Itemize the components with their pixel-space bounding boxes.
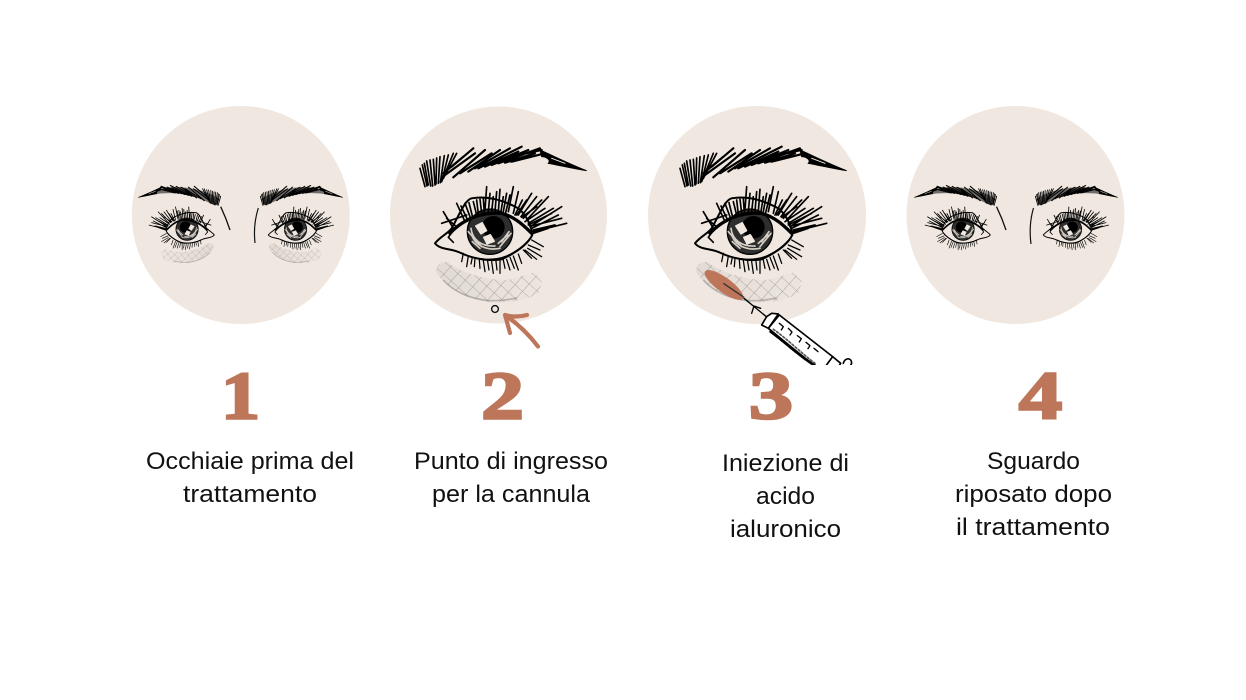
circle background <box>132 106 350 324</box>
circle background <box>390 106 607 324</box>
icon: syringe <box>744 298 852 372</box>
entry point marker <box>492 306 498 312</box>
illustration: rested eyes <box>914 186 1118 250</box>
infographic: four treatment steps <box>132 106 1124 537</box>
circle background <box>648 106 866 324</box>
panel: step 3 <box>648 106 866 543</box>
illustration: single eye with hatch <box>680 147 847 307</box>
illustration: single eye with hatch <box>420 147 587 307</box>
caption: step 4: riposato dopo <box>955 481 1112 508</box>
caption: step 1: Occhiaie prima del <box>146 448 354 475</box>
circle background <box>906 106 1124 324</box>
number 4: 4 <box>1019 358 1062 433</box>
caption: step 2: Punto di ingresso <box>414 448 608 475</box>
caption: step 3: ialuronico <box>730 516 841 543</box>
panel: step 2 <box>390 106 608 508</box>
caption: step 3: acido <box>756 483 815 510</box>
illustration: eyes with dark circles <box>138 186 343 265</box>
caption: step 4: il trattamento <box>956 514 1110 541</box>
number 2: 2 <box>481 358 524 433</box>
caption: step 1: trattamento <box>183 481 317 508</box>
number 1: 1 <box>221 358 260 433</box>
filler deposit <box>701 265 747 305</box>
caption: step 4: Sguardo <box>987 448 1080 475</box>
arrow <box>505 315 538 346</box>
panel: step 4 <box>906 106 1124 541</box>
caption: step 2: per la cannula <box>432 481 591 508</box>
caption: step 3: Iniezione di <box>722 450 849 477</box>
number 3: 3 <box>749 359 793 434</box>
panel: step 1 <box>132 106 354 508</box>
